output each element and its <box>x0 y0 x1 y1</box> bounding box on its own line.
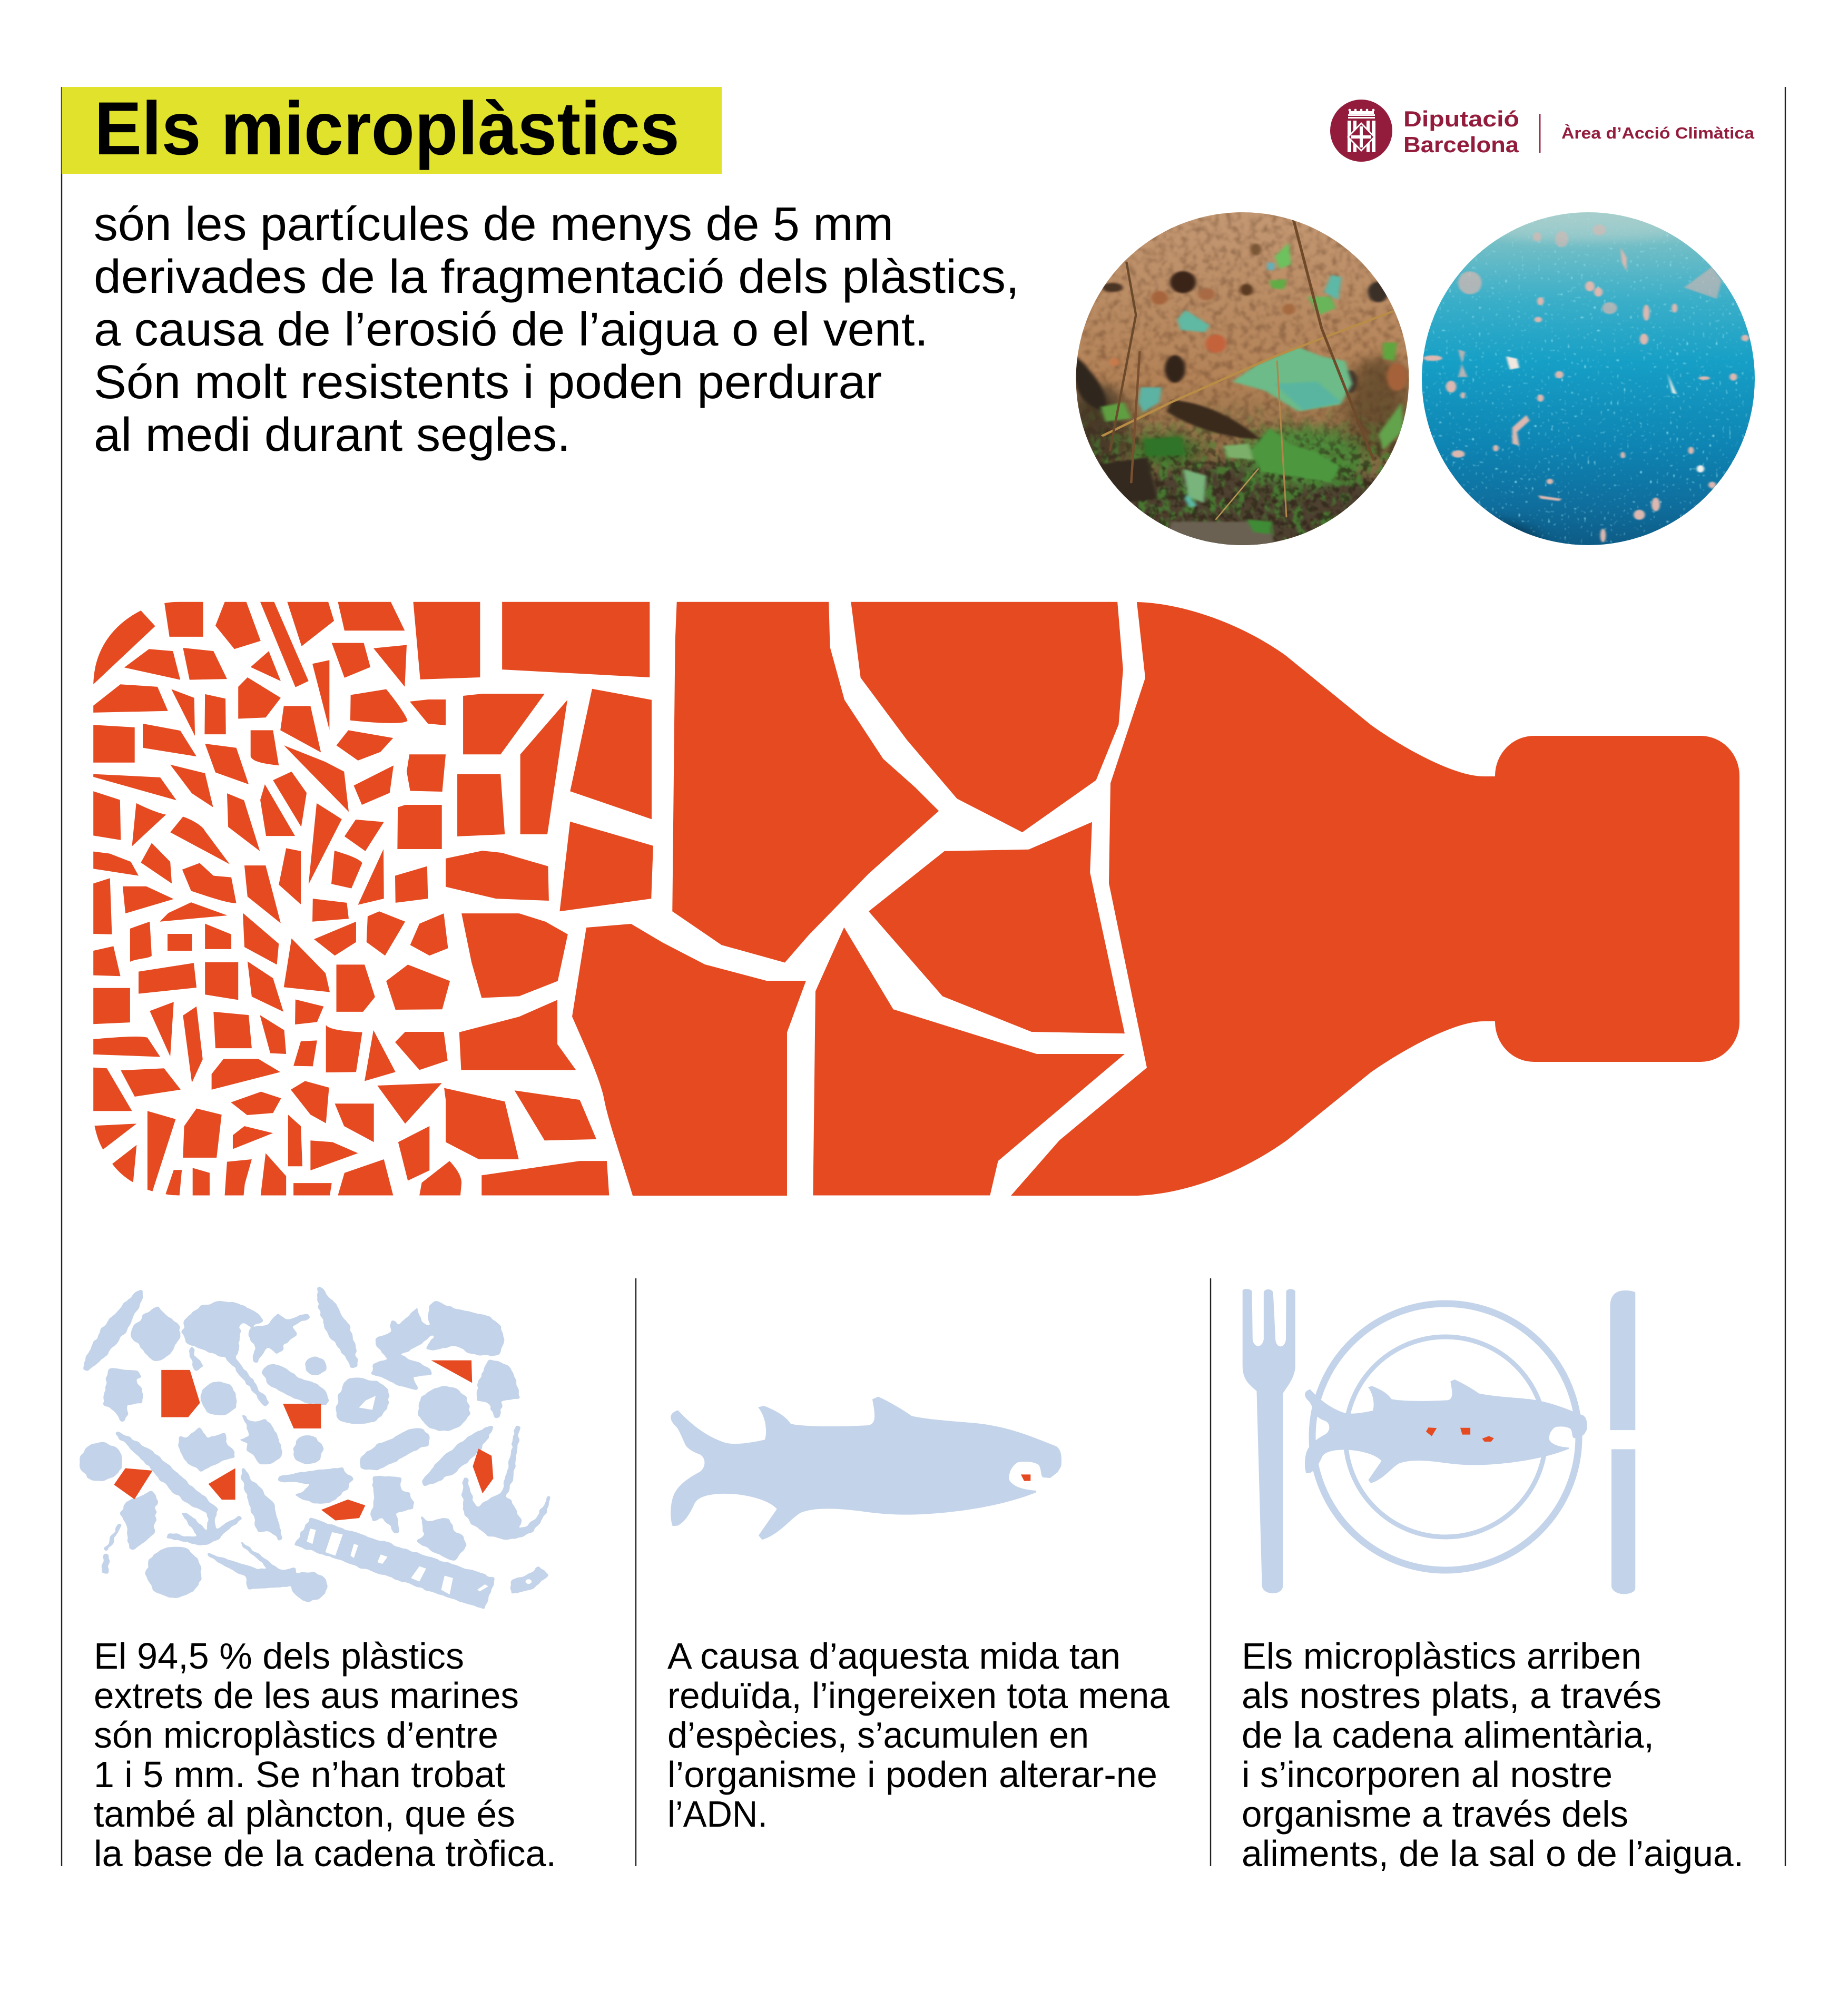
logo: Diputació Barcelona <box>1330 100 1755 162</box>
small fragments at the bottle base <box>93 602 653 1195</box>
soil shadows <box>1074 356 1106 411</box>
plastic bottle fragmenting into microplastics <box>93 602 1739 1196</box>
fish on the plate <box>1305 1379 1587 1483</box>
intro text: a causa de l’erosió de l’aigua o el vent. <box>94 303 928 356</box>
text: seabirds and plankton <box>94 1635 556 1874</box>
intro text <box>94 198 1019 461</box>
text: seabirds and plankton: 1 i 5 mm. Se n’han trobat <box>94 1754 505 1795</box>
orange stones <box>1205 334 1226 353</box>
intro text: són les partícules de menys de 5 mm <box>94 198 893 251</box>
stalks <box>1103 220 1392 519</box>
intro text: derivades de la fragmentació dels plàstics, <box>94 251 1019 303</box>
text: reaching our plates <box>1242 1635 1744 1874</box>
text: ingestion by species: reduïda, l’ingereixen tota mena <box>667 1675 1169 1716</box>
text: seabirds and plankton: també al plàncton, que és <box>94 1793 515 1835</box>
photo: microplastics in water <box>1416 209 1757 570</box>
text: ingestion by species <box>667 1635 1169 1835</box>
plate <box>1312 1304 1579 1570</box>
logo: Diputació Barcelona: Barcelona <box>1403 132 1519 157</box>
large fragments at the bottle centre <box>672 602 1125 1195</box>
text: reaching our plates: de la cadena alimentària, <box>1242 1714 1654 1756</box>
text: reaching our plates: organisme a través dels <box>1242 1793 1628 1835</box>
text: seabirds and plankton: El 94,5 % dels plàstics <box>94 1635 464 1677</box>
bottle cap <box>1495 736 1739 1062</box>
photo: plastic on soil <box>1063 211 1412 549</box>
green leaves <box>1232 347 1352 411</box>
icon: fish swallowing a microplastic <box>671 1397 1061 1540</box>
text: seabirds and plankton: són microplàstics d’entre <box>94 1714 498 1756</box>
logo: Diputació Barcelona: Diputació <box>1403 106 1519 131</box>
intro text: Són molt resistents i poden perdurar <box>94 356 882 409</box>
icon: fish on a plate with cutlery <box>1243 1289 1635 1594</box>
text: ingestion by species: l’organisme i poden alterar-ne <box>667 1754 1157 1795</box>
icon: microplastics among plankton <box>80 1286 551 1610</box>
text: reaching our plates: Els microplàstics arriben <box>1242 1635 1641 1677</box>
text: ingestion by species: d’espècies, s’acumulen en <box>667 1714 1089 1756</box>
fork <box>1243 1289 1295 1593</box>
microplastics inside the fish <box>1426 1427 1494 1442</box>
logo: Diputació Barcelona: Àrea d’Acció Climàtica <box>1561 124 1755 142</box>
text: seabirds and plankton: la base de la cadena tròfica. <box>94 1833 556 1874</box>
lower central fragment <box>572 924 806 1196</box>
text: reaching our plates: i s’incorporen al nostre <box>1242 1754 1613 1795</box>
knife <box>1610 1290 1635 1594</box>
text: seabirds and plankton: extrets de les aus marines <box>94 1675 519 1716</box>
title: Els microplàstics <box>94 87 680 171</box>
text: ingestion by species: A causa d’aquesta mida tan <box>667 1635 1120 1677</box>
text: reaching our plates: als nostres plats, a través <box>1242 1675 1662 1716</box>
text: ingestion by species: l’ADN. <box>667 1793 768 1835</box>
teal fragments <box>1177 310 1210 332</box>
text: reaching our plates: aliments, de la sal o de l’aigua. <box>1242 1833 1744 1874</box>
intro text: al medi durant segles. <box>94 409 571 461</box>
intact bottle shoulder and neck <box>1011 602 1496 1196</box>
